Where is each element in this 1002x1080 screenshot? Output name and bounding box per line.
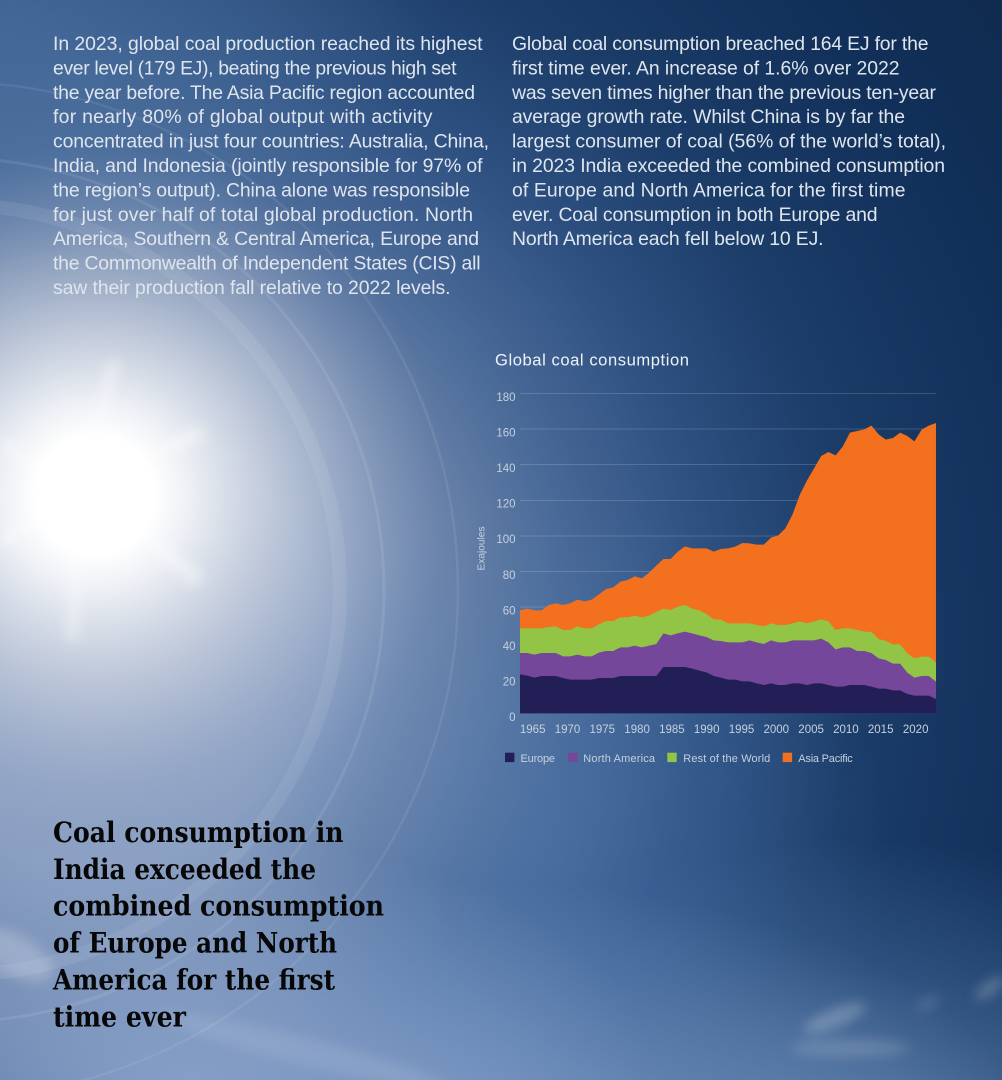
text block: coal production: for just over half of total global production. North bbox=[53, 204, 473, 226]
legend bbox=[505, 753, 853, 765]
text block: coal production: for nearly 80% of global output with activity bbox=[53, 106, 433, 128]
x-axis labels: 1965 bbox=[520, 724, 545, 736]
y-axis labels bbox=[496, 392, 516, 724]
text block: coal production bbox=[53, 33, 489, 299]
x-axis labels: 2015 bbox=[868, 724, 893, 736]
text block: coal production: India, and Indonesia (jointly responsible for 97% of bbox=[53, 155, 483, 177]
clouds bbox=[0, 917, 1002, 1080]
stacked areas bbox=[520, 423, 936, 713]
area: North America bbox=[520, 632, 936, 713]
legend: Asia Pacific bbox=[798, 753, 853, 765]
text block: coal consumption bbox=[511, 33, 946, 250]
x-axis labels: 1980 bbox=[624, 724, 650, 736]
callout heading: Coal consumption in bbox=[53, 816, 344, 849]
y-axis labels: 180 bbox=[496, 392, 516, 404]
legend: North America bbox=[583, 753, 656, 765]
x-axis labels bbox=[520, 724, 928, 736]
x-axis labels: 2020 bbox=[903, 724, 928, 736]
text block: coal production: concentrated in just four countries: Australia, China, bbox=[53, 131, 489, 153]
text block: coal production: the Commonwealth of Independent States (CIS) all bbox=[53, 253, 480, 275]
y-axis labels: 100 bbox=[496, 534, 516, 546]
text block: coal consumption: of Europe and North America for the first time bbox=[512, 179, 906, 201]
text block: coal consumption: first time ever. An increase of 1.6% over 2022 bbox=[512, 57, 900, 79]
y-axis labels: 140 bbox=[496, 463, 516, 475]
y-axis labels: 60 bbox=[503, 605, 516, 617]
y-axis labels: 160 bbox=[496, 428, 516, 440]
callout heading: of Europe and North bbox=[53, 926, 337, 960]
callout heading: time ever bbox=[53, 1000, 187, 1034]
y-axis labels: 120 bbox=[496, 499, 516, 511]
sun rings bbox=[0, 82, 458, 1080]
x-axis labels: 1985 bbox=[659, 724, 685, 736]
y-axis labels: 0 bbox=[509, 712, 516, 724]
text block: coal production: saw their production fall relative to 2022 levels. bbox=[53, 277, 450, 299]
text block: coal consumption: ever. Coal consumption in both Europe and bbox=[512, 204, 878, 226]
area: Rest of the World bbox=[520, 605, 936, 713]
area: Asia Pacific bbox=[520, 423, 936, 713]
x-axis labels: 2000 bbox=[764, 724, 789, 736]
text block: coal production: the region’s output). China alone was responsible bbox=[53, 179, 470, 201]
text block: coal production: the year before. The Asia Pacific region accounted bbox=[53, 82, 475, 104]
x-axis labels: 2005 bbox=[798, 724, 824, 736]
y-axis labels: 20 bbox=[503, 676, 516, 688]
legend: Rest of the World bbox=[683, 753, 770, 765]
text block: coal consumption: was seven times higher than the previous ten-year bbox=[511, 82, 937, 104]
callout heading: India exceeded the bbox=[53, 853, 316, 886]
callout heading: combined consumption bbox=[53, 890, 384, 922]
text block: coal production: In 2023, global coal production reached its highest bbox=[53, 33, 483, 55]
text block: coal consumption: Global coal consumption breached 164 EJ for the bbox=[512, 33, 928, 55]
sun glow with rays bbox=[0, 145, 445, 845]
text block: coal consumption: average growth rate. Whilst China is by far the bbox=[512, 106, 905, 128]
x-axis labels: 2010 bbox=[833, 724, 859, 736]
x-axis labels: 1975 bbox=[590, 724, 615, 736]
chart title: Global coal consumption bbox=[495, 350, 689, 370]
y-axis title: Exajoules bbox=[476, 526, 488, 570]
legend: Europe bbox=[520, 753, 555, 765]
area: Europe bbox=[520, 667, 936, 713]
x-axis labels: 1990 bbox=[694, 724, 719, 736]
callout heading bbox=[52, 816, 384, 1034]
chart: global coal consumption bbox=[476, 350, 936, 765]
text block: coal consumption: largest consumer of coal (56% of the world’s total), bbox=[512, 131, 946, 153]
text block: coal production: ever level (179 EJ), beating the previous high set bbox=[53, 57, 457, 79]
callout heading: America for the first bbox=[52, 964, 335, 996]
text block: coal production: America, Southern & Central America, Europe and bbox=[53, 228, 479, 250]
y-axis labels: 40 bbox=[503, 641, 516, 653]
text block: coal consumption: in 2023 India exceeded the combined consumption bbox=[512, 155, 945, 177]
x-axis labels: 1970 bbox=[555, 724, 580, 736]
x-axis labels: 1995 bbox=[729, 724, 754, 736]
text block: coal consumption: North America each fell below 10 EJ. bbox=[512, 228, 824, 250]
y-axis labels: 80 bbox=[503, 570, 516, 582]
